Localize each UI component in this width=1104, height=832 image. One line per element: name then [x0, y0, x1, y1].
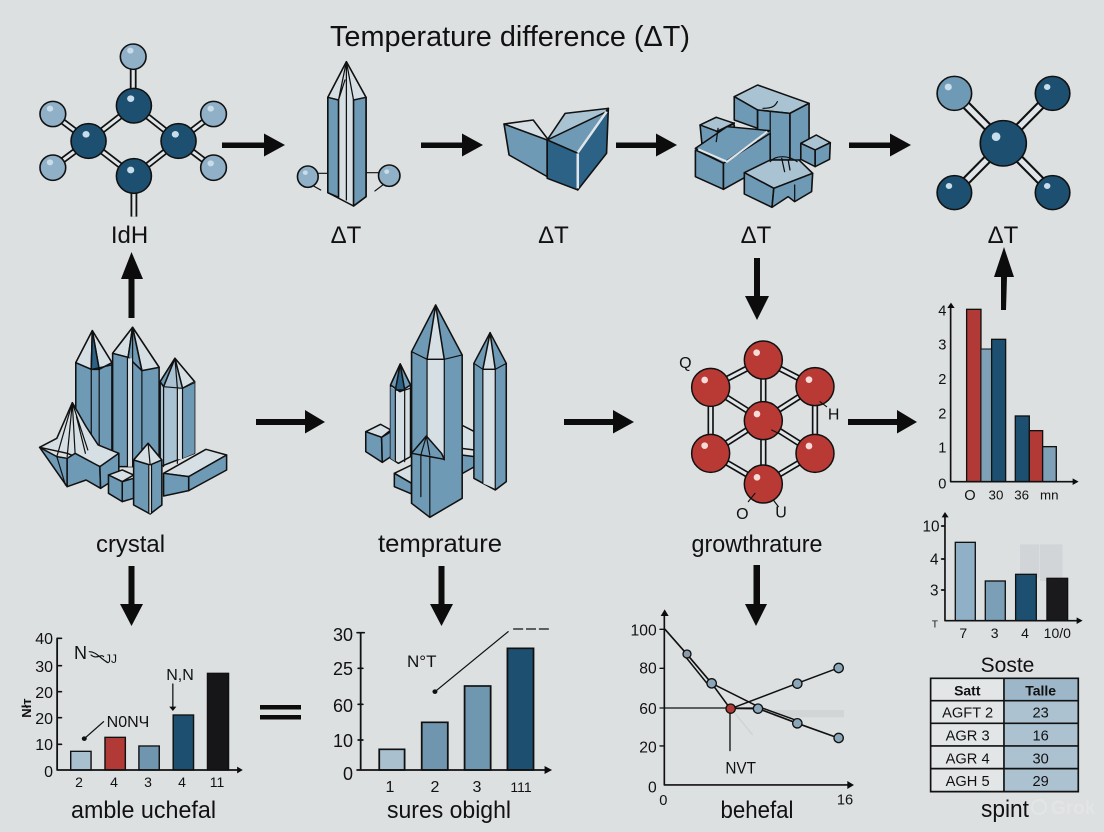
- table: AGFT 2: [942, 706, 993, 722]
- line chart: 80: [639, 661, 657, 678]
- label: behefal: behefal: [720, 797, 794, 824]
- table: 29: [1032, 774, 1049, 790]
- label: crystal: crystal: [96, 531, 165, 558]
- icon: four-arm molecule: [937, 76, 1070, 210]
- line chart: 20: [639, 740, 657, 757]
- chart labels: bottom left: 3: [144, 774, 152, 790]
- arrow: lattice down to line chart: [745, 565, 767, 626]
- icon: red hexagonal lattice: Q: [679, 355, 692, 372]
- line chart: 16: [837, 792, 853, 808]
- arrow: delta T down to red lattice: [745, 258, 769, 320]
- chart labels: bottom middle: 111: [510, 779, 532, 795]
- table: 23: [1032, 706, 1049, 722]
- table: AGR 3: [946, 729, 990, 745]
- bar chart: bottom left: [57, 638, 243, 773]
- arrow: prism to shard: [421, 134, 483, 156]
- table: Talle: [1025, 682, 1056, 698]
- icon: red hexagonal lattice: O: [736, 506, 749, 523]
- chart labels: bottom left: 4: [178, 774, 186, 790]
- icon: tall prism cluster: [366, 305, 506, 517]
- line chart: 0: [648, 779, 657, 796]
- chart labels: bottom left: 10: [35, 737, 53, 754]
- chart labels: bottom left: N0NЧ: [107, 714, 149, 731]
- arrow: blocks to four-atom molecule: [849, 134, 911, 156]
- chart labels: bottom left: 20: [35, 685, 53, 702]
- chart labels: bottom middle: 30: [333, 625, 353, 645]
- arrow: shard to blocks: [616, 134, 677, 156]
- chart labels: bottom middle: 10: [333, 731, 353, 751]
- icon: ring molecule: [40, 44, 226, 217]
- icon: block cluster: [695, 85, 830, 207]
- equals sign: [260, 705, 301, 720]
- bar chart: top right: 4: [938, 304, 946, 320]
- arrow: lattice to bar chart: [848, 410, 917, 434]
- bar chart: top right: 1: [938, 440, 946, 456]
- table: AGR 4: [946, 751, 990, 767]
- bar chart: top right: 2: [938, 406, 946, 422]
- bar chart: lower right: 3: [991, 625, 999, 641]
- bar chart: lower right: 3: [930, 583, 939, 600]
- watermark: Grok: [1032, 798, 1096, 819]
- table: 30: [1032, 751, 1049, 767]
- bar chart: top right: 36: [1014, 487, 1029, 502]
- label: delta T 2: ΔT: [331, 222, 362, 249]
- label: Soste: Soste: [981, 654, 1034, 677]
- arrow: crystal up to IdH: [121, 252, 143, 318]
- icon: single prism with atoms: [297, 62, 400, 206]
- arrow: temperature to lattice: [564, 410, 634, 434]
- watermark: Grok: Grok: [1051, 798, 1096, 819]
- line chart: 0: [659, 793, 667, 809]
- label: delta T 3: ΔT: [538, 222, 569, 249]
- line chart: NVT: [725, 758, 756, 777]
- chart labels: bottom middle: 3: [473, 779, 482, 796]
- chart labels: bottom middle: [333, 625, 532, 796]
- label: delta T 5: ΔT: [988, 222, 1019, 249]
- icon: red hexagonal lattice: [679, 341, 839, 523]
- bar chart: top right: 0: [938, 476, 946, 492]
- bar chart: lower right: 4: [930, 551, 939, 568]
- label: spint: spint: [981, 796, 1029, 823]
- arrow: crystal to temperature prisms: [256, 410, 325, 434]
- bar chart: top right: 30: [989, 487, 1003, 502]
- chart labels: bottom middle: 25: [333, 659, 353, 679]
- arrow: crystal down to chart: [120, 566, 143, 626]
- bar chart: top right: 3: [938, 337, 946, 353]
- chart labels: bottom left: N: [74, 643, 87, 663]
- bar chart: lower right: 10: [922, 519, 940, 536]
- line chart: 60: [639, 701, 657, 718]
- chart labels: bottom left: JJ: [105, 652, 117, 666]
- bar chart: top right: 2: [938, 372, 946, 388]
- bar chart: lower right: 10/0: [1044, 625, 1071, 641]
- chart labels: bottom left: Nłт: [19, 698, 34, 718]
- arrow: bar chart up to delta T: [994, 247, 1014, 310]
- chart labels: bottom left: 20: [35, 711, 53, 728]
- chart labels: bottom left: 40: [35, 631, 53, 648]
- chart labels: bottom left: 0: [44, 764, 53, 781]
- bar chart: lower right: [922, 512, 1083, 641]
- chart labels: bottom middle: N°T: [407, 652, 436, 671]
- label: amble uchefal: amble uchefal: [71, 797, 216, 824]
- chart labels: bottom middle: 0: [343, 764, 353, 784]
- icon: red hexagonal lattice: U: [775, 505, 787, 522]
- bar chart: top right: O: [964, 488, 976, 504]
- bar chart: lower right: 4: [1021, 625, 1029, 641]
- bar chart: top right: [938, 303, 1079, 504]
- chart labels: bottom middle: 60: [333, 696, 353, 716]
- line chart: [631, 609, 854, 809]
- title: Temperature difference (ΔT): [330, 21, 690, 53]
- chart labels: bottom left: 11: [210, 774, 224, 790]
- chart labels: bottom left: 4: [110, 774, 118, 790]
- icon: angular shard crystal: [504, 108, 608, 190]
- bar chart: lower right: 7: [959, 625, 967, 641]
- label: IdH: IdH: [111, 222, 148, 249]
- chart labels: bottom middle: 2: [431, 779, 440, 796]
- icon: red hexagonal lattice: H: [828, 406, 839, 423]
- arrow: temperature down to chart: [430, 566, 453, 626]
- bar chart: bottom middle: [357, 629, 552, 774]
- icon: crystal cluster: [40, 327, 227, 514]
- chart labels: bottom middle: 1: [386, 779, 395, 796]
- table: 16: [1032, 729, 1049, 745]
- label: sures obighl: sures obighl: [387, 797, 511, 824]
- arrow: molecule to prism: [222, 134, 285, 156]
- table: Satt: [954, 682, 981, 698]
- label: temprature: temprature: [378, 530, 502, 558]
- bar chart: lower right: T: [932, 619, 938, 630]
- chart labels: bottom left: 2: [75, 774, 83, 790]
- label: growthrature: growthrature: [692, 531, 822, 558]
- chart labels: bottom left: N,N: [166, 667, 194, 684]
- chart labels: bottom left: [19, 631, 224, 790]
- label: delta T 4: ΔT: [741, 222, 772, 249]
- table: AGH 5: [946, 774, 990, 790]
- line chart: 100: [631, 623, 657, 640]
- chart labels: bottom left: 30: [35, 659, 53, 676]
- bar chart: top right: mn: [1040, 487, 1059, 502]
- table: [931, 678, 1078, 792]
